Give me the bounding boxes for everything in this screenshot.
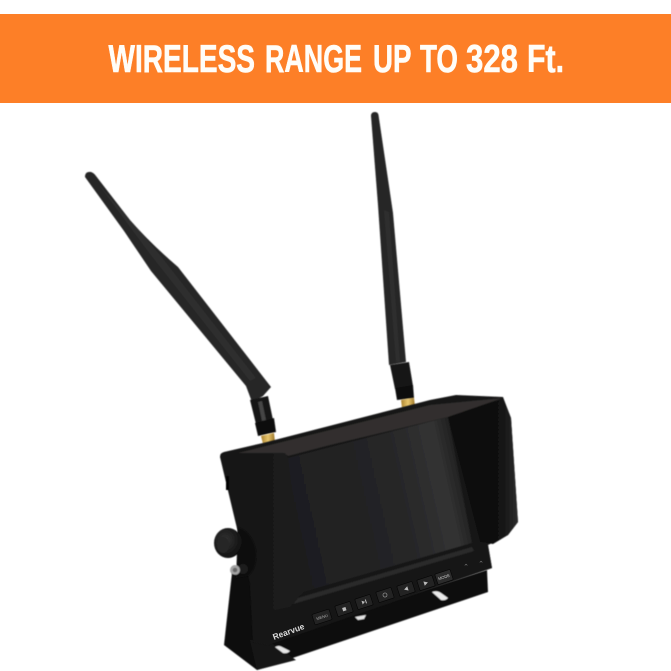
banner title: 328: [466, 38, 518, 81]
button: stop: [335, 601, 353, 617]
side slot: [226, 476, 229, 490]
button: enter: ⌃: [478, 560, 484, 568]
button: next: [355, 594, 373, 610]
rear housing: [220, 395, 518, 645]
mounting bracket: [224, 570, 488, 670]
button: back: ⌃: [463, 563, 469, 571]
header banner: [0, 14, 671, 103]
left antenna: [85, 172, 276, 444]
button: mode: [435, 569, 453, 585]
button: mode: MODE: [438, 573, 451, 581]
hood top: [238, 398, 503, 456]
lower bezel: [253, 543, 492, 645]
banner title: UP: [373, 38, 411, 81]
brand logo: Rearvue: [271, 621, 306, 642]
button: power: [376, 587, 394, 603]
screen: [288, 417, 472, 592]
control buttons: [312, 560, 484, 625]
bezel ridge: [293, 547, 474, 604]
right antenna: [371, 112, 415, 408]
hood left side: [237, 453, 303, 612]
button: menu: [312, 609, 332, 625]
hood right flap: [448, 398, 518, 544]
monitor body: [220, 395, 518, 645]
banner title: TO: [420, 38, 458, 81]
button: right: [417, 575, 435, 591]
banner title: RANGE: [265, 38, 362, 81]
button: left: [397, 581, 415, 597]
bolt: [238, 564, 248, 574]
button: menu: MENU: [316, 613, 328, 621]
adjustment knob: [214, 527, 256, 578]
banner title: Ft.: [527, 38, 564, 81]
banner title: WIRELESS: [108, 38, 255, 81]
